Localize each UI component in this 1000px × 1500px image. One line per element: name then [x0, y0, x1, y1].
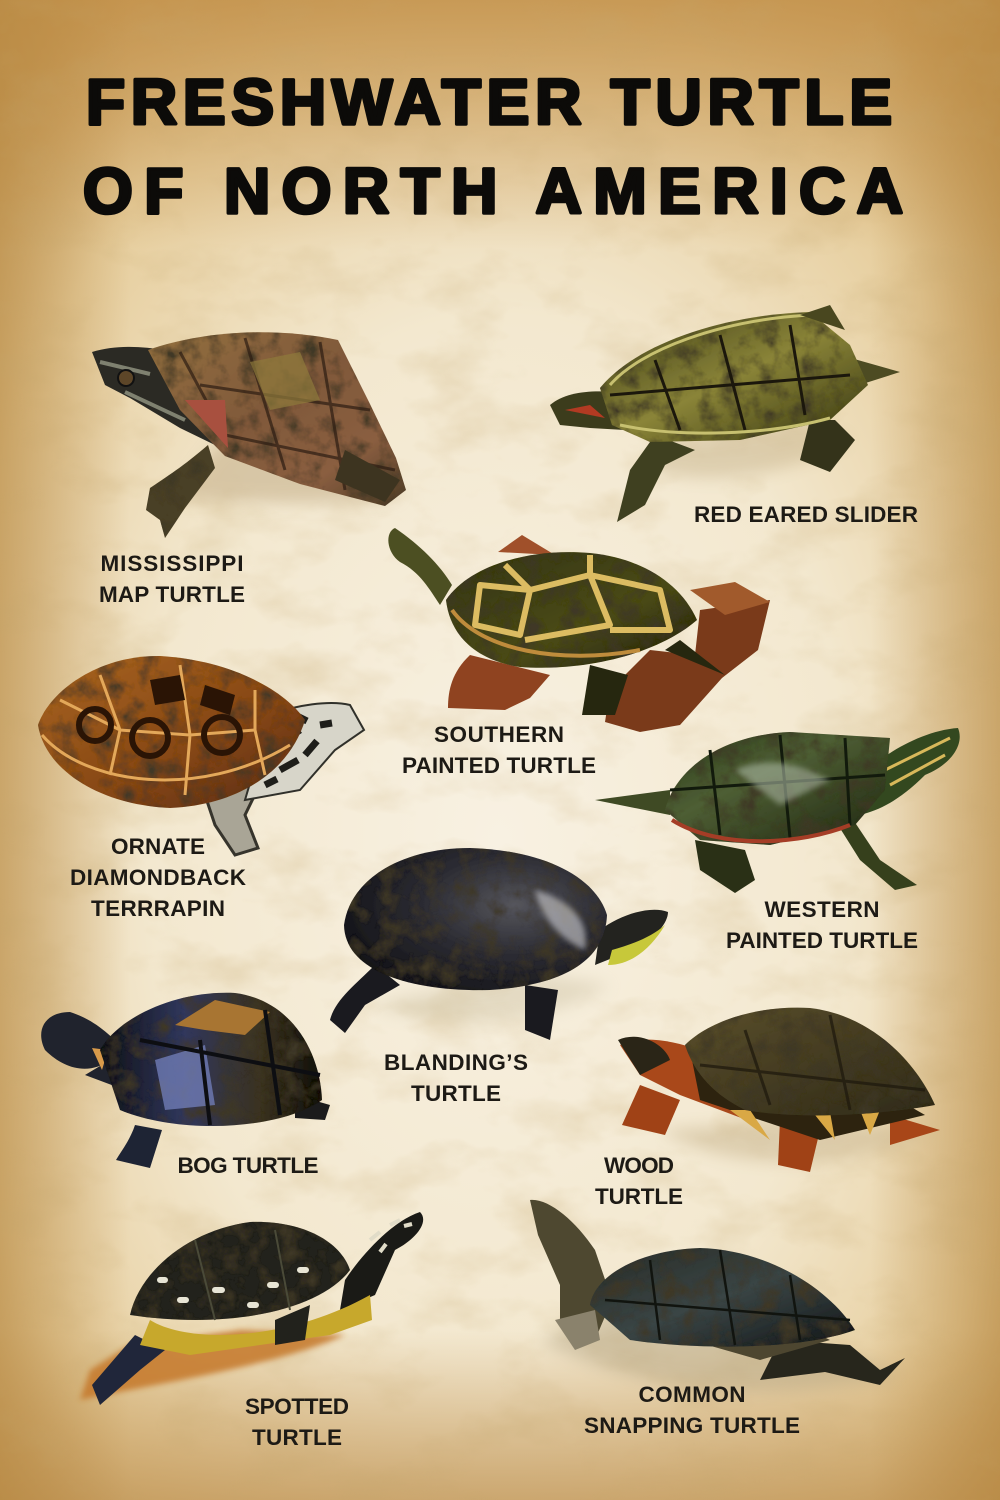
turtle: red eared slider — [550, 305, 900, 522]
label: western painted turtle — [726, 897, 918, 953]
turtle: Mississippi map turtle — [92, 332, 406, 538]
label: southern painted turtle: SOUTHERN — [434, 722, 564, 747]
title — [83, 66, 903, 227]
label: ornate diamondback terrapin: ORNATE — [111, 834, 205, 859]
label: Blanding's turtle: BLANDING’S — [384, 1050, 528, 1075]
label: Mississippi map turtle: MAP TURTLE — [99, 582, 245, 607]
turtle: Blanding's turtle — [330, 848, 668, 1040]
label: western painted turtle: WESTERN — [764, 897, 880, 922]
title: FRESHWATER TURTLE — [86, 66, 892, 138]
label: Mississippi map turtle: MISSISSIPPI — [100, 551, 244, 576]
label: spotted turtle: TURTLE — [252, 1425, 342, 1450]
turtle: southern painted turtle — [388, 528, 770, 732]
label: red eared slider: RED EARED SLIDER — [694, 502, 918, 527]
turtle: spotted turtle — [80, 1212, 423, 1405]
turtle: western painted turtle — [595, 728, 960, 893]
label: ornate diamondback terrapin: DIAMONDBACK — [70, 865, 247, 890]
label: spotted turtle — [245, 1394, 349, 1450]
label: southern painted turtle: PAINTED TURTLE — [402, 753, 596, 778]
label: common snapping turtle — [584, 1382, 800, 1438]
label: western painted turtle: PAINTED TURTLE — [726, 928, 918, 953]
label: ornate diamondback terrapin — [70, 834, 247, 921]
label: bog turtle: BOG TURTLE — [178, 1153, 318, 1178]
label: spotted turtle: SPOTTED — [245, 1394, 349, 1419]
label: ornate diamondback terrapin: TERRRAPIN — [91, 896, 225, 921]
label: common snapping turtle: COMMON — [638, 1382, 746, 1407]
label: wood turtle — [595, 1153, 683, 1209]
label: common snapping turtle: SNAPPING TURTLE — [584, 1413, 800, 1438]
label: Blanding's turtle: TURTLE — [411, 1081, 501, 1106]
label: southern painted turtle — [402, 722, 596, 778]
turtle: ornate diamondback terrapin — [38, 656, 364, 855]
title: OF NORTH AMERICA — [83, 155, 903, 227]
label: wood turtle: WOOD — [604, 1153, 674, 1178]
turtle: wood turtle — [618, 1008, 940, 1172]
label: Mississippi map turtle — [99, 551, 245, 607]
label: wood turtle: TURTLE — [595, 1184, 683, 1209]
turtle: common snapping turtle — [530, 1200, 905, 1391]
turtle: bog turtle — [41, 993, 330, 1168]
label: Blanding's turtle — [384, 1050, 528, 1106]
